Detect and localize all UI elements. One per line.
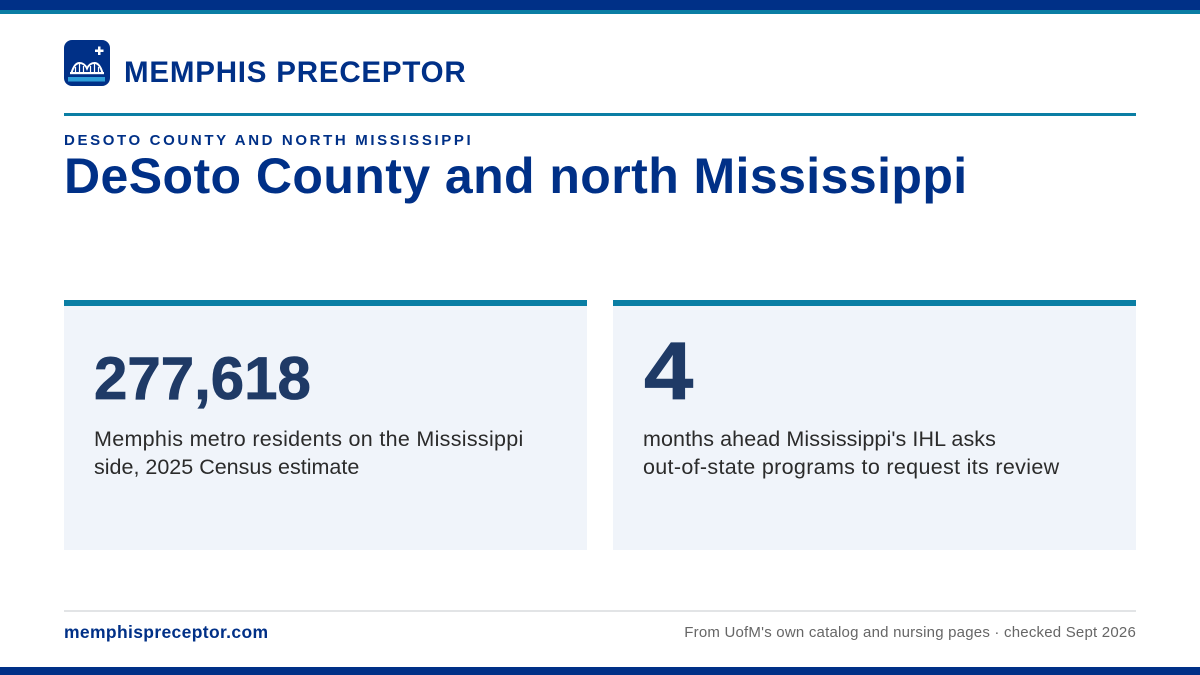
panel: metro residents stat (64, 300, 587, 550)
stat description: side, 2025 Census estimate (94, 455, 359, 479)
footer source note: From UofM's own catalog and nursing pages · checked Sept 2026 (684, 624, 1136, 641)
stat description: out-of-state programs to request its review (643, 455, 1059, 479)
stat number: 277,618 (94, 345, 311, 412)
stat description: months ahead Mississippi's IHL asks (643, 427, 996, 451)
eyebrow: DESOTO COUNTY AND NORTH MISSISSIPPI (64, 132, 473, 149)
footer rule (64, 610, 1136, 612)
bottom band (0, 667, 1200, 675)
stat number: 4 (644, 326, 693, 417)
stat description (643, 427, 1060, 479)
header rule (64, 113, 1136, 116)
footer site name: memphispreceptor.com (64, 622, 268, 642)
stat description: Memphis metro residents on the Mississippi (94, 427, 524, 451)
panel: months ahead stat (613, 300, 1136, 550)
stat description (94, 427, 524, 479)
logo icon: bridge with plus (64, 40, 110, 86)
title: DeSoto County and north Mississippi (64, 148, 968, 204)
top band (0, 0, 1200, 14)
brand name: MEMPHIS PRECEPTOR (124, 56, 467, 89)
